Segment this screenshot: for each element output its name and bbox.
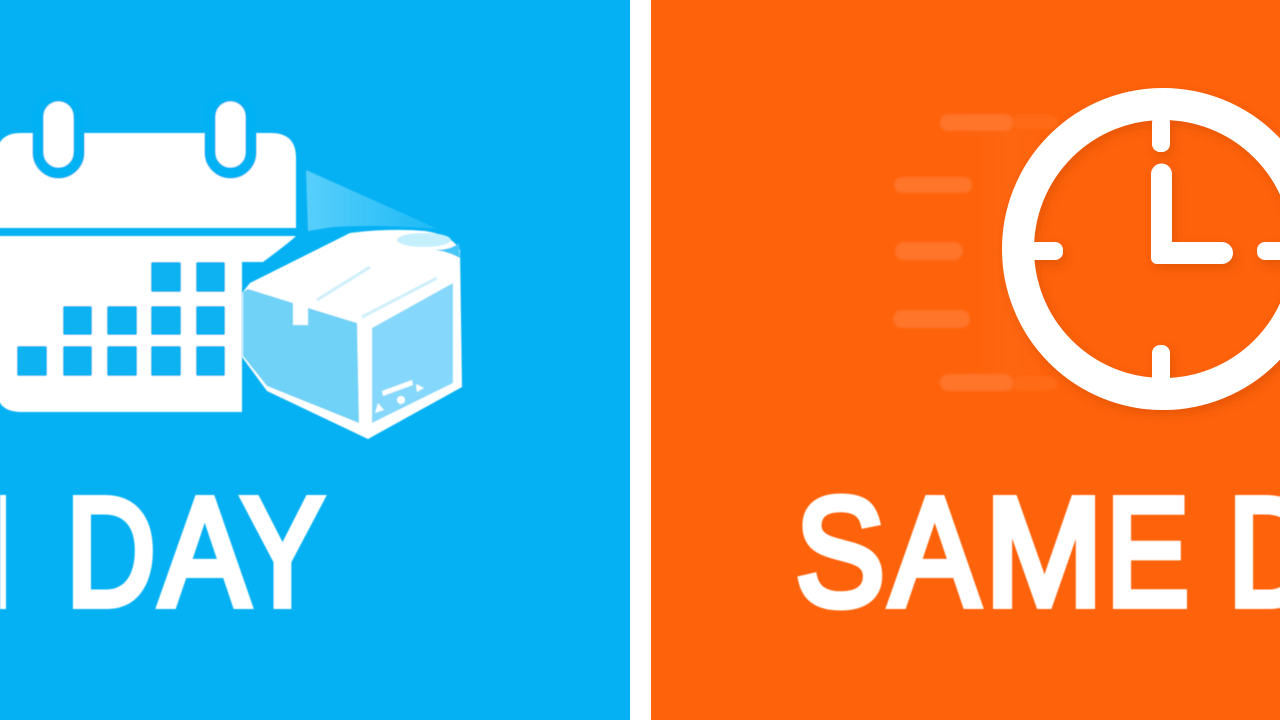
icon: motion trails bbox=[893, 114, 1058, 391]
icon: clock bbox=[1018, 104, 1280, 394]
icon: calendar bbox=[0, 96, 296, 412]
panel: same day bbox=[651, 0, 1280, 720]
heading: 1 day: A bbox=[160, 466, 249, 638]
speed lines bbox=[893, 114, 1013, 391]
clock ticks bbox=[1028, 115, 1280, 387]
box label marks bbox=[375, 380, 424, 413]
heading: same day: A bbox=[890, 466, 979, 638]
heading: same day: S bbox=[796, 466, 885, 638]
clock hands bbox=[1151, 164, 1233, 264]
icon: light beam bbox=[306, 170, 438, 231]
heading: same day: M bbox=[985, 466, 1103, 638]
heading: 1 day: Y bbox=[241, 466, 324, 638]
calendar date grid bbox=[17, 262, 225, 376]
divider bbox=[630, 0, 651, 720]
icon: parcel box bbox=[242, 230, 462, 439]
heading: 1 day: D bbox=[66, 466, 156, 638]
calendar ring: right bbox=[210, 96, 251, 173]
panel: 1 day bbox=[0, 0, 630, 720]
heading: 1 day bbox=[0, 494, 328, 610]
calendar ring: left bbox=[38, 96, 79, 173]
heading: same day: E bbox=[1106, 466, 1189, 638]
heading: same day bbox=[796, 466, 1280, 638]
